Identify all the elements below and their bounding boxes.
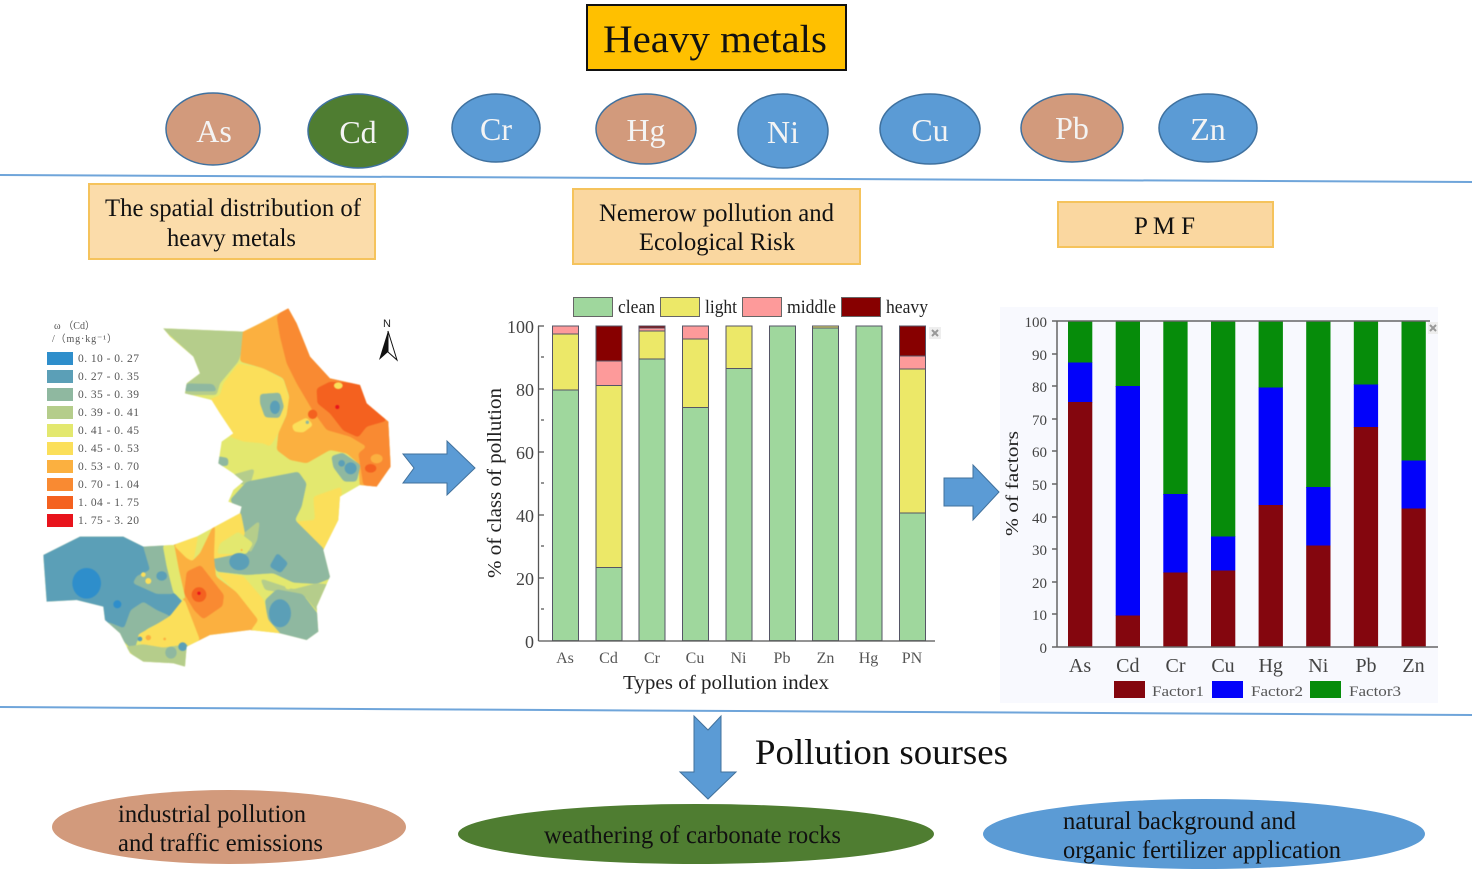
x axis labels: Cd (599, 650, 618, 667)
badge: Ni (738, 94, 828, 168)
y axis labels: 20 (516, 569, 534, 589)
arrow: charts to pollution sources (680, 716, 736, 799)
badge: Ni: Ni (767, 114, 799, 150)
x axis labels: Cr (644, 650, 661, 667)
badge: As (166, 93, 260, 165)
y axis labels: 100 (507, 317, 534, 337)
source: natural background and organic fertilizer application: organic fertilizer application (1063, 837, 1341, 864)
icon: chart handle (1428, 322, 1438, 334)
icon: north arrow: N (383, 318, 391, 330)
map legend: 0. 45 - 0. 53 (78, 443, 139, 455)
x axis labels: Pb (1355, 655, 1377, 677)
badge: Cd (308, 94, 408, 168)
y axis title: % of factors (1002, 431, 1022, 536)
x axis labels: PN (902, 650, 923, 667)
map legend: 0. 35 - 0. 39 (78, 389, 139, 401)
x axis labels: Cu (686, 650, 704, 667)
arrow: map to Nemerow chart (403, 441, 475, 495)
badge: Hg: Hg (626, 112, 666, 148)
icon: north arrow (379, 318, 397, 360)
y axis labels: 40 (1032, 511, 1047, 527)
x axis labels: Ni (730, 650, 747, 667)
chart legend: Factor2 (1251, 684, 1303, 700)
map legend: 0. 10 - 0. 27 (78, 353, 139, 365)
badge: Cr (452, 94, 540, 162)
chart legend: clean (618, 297, 655, 318)
title: Heavy metals: Heavy metals (603, 18, 827, 61)
y axis labels: 80 (1032, 380, 1047, 396)
heading: spatial distribution: The spatial distribution of (105, 195, 362, 222)
y axis labels: 0 (1040, 641, 1047, 657)
source: industrial pollution and traffic emissions: industrial pollution (118, 801, 306, 828)
chart legend: heavy (886, 297, 928, 318)
y axis labels: 40 (516, 506, 534, 526)
badge: Pb: Pb (1055, 110, 1089, 146)
y axis labels: 50 (1032, 478, 1047, 494)
map legend: 1. 04 - 1. 75 (78, 497, 139, 509)
badge: Zn (1159, 94, 1257, 162)
y axis labels (1024, 315, 1047, 657)
x axis labels: Cu (1211, 655, 1235, 677)
badge: Hg (596, 94, 696, 164)
y axis labels: 60 (516, 443, 534, 463)
y axis labels: 30 (1032, 543, 1047, 559)
map regions (42, 308, 392, 668)
y axis labels: 20 (1032, 576, 1047, 592)
map legend: /（mg·kg⁻¹） (52, 333, 117, 345)
chart legend: Factor3 (1349, 684, 1401, 700)
x axis labels: Zn (1402, 655, 1425, 677)
badge: Pb (1021, 94, 1123, 162)
y axis labels (507, 317, 534, 652)
heading: PMF: P M F (1134, 213, 1195, 240)
chart legend: middle (787, 297, 836, 318)
heading: Nemerow pollution and ecological risk: Ecological Risk (639, 229, 795, 256)
icon: chart handle (929, 327, 941, 339)
y axis labels: 0 (525, 632, 534, 652)
source: industrial pollution and traffic emissions: and traffic emissions (118, 830, 323, 857)
heading: spatial distribution (89, 184, 375, 259)
stacked bar chart: Nemerow classes (484, 297, 941, 694)
heading: Pollution sourses: Pollution sourses (755, 732, 1008, 772)
x axis labels: Ni (1308, 655, 1329, 677)
y axis labels: 60 (1032, 445, 1047, 461)
x axis labels: As (1069, 655, 1091, 677)
x axis labels: Cd (1116, 655, 1139, 677)
x axis title: Types of pollution index (623, 672, 829, 694)
x axis labels (1069, 655, 1425, 677)
badge: Cu (880, 94, 980, 164)
source: natural background and organic fertilizer application (983, 799, 1425, 869)
map legend (47, 320, 139, 527)
y axis labels: 90 (1032, 348, 1047, 364)
badge: As: As (196, 113, 232, 149)
x axis labels: Hg (859, 650, 878, 667)
source: natural background and organic fertilizer application: natural background and (1063, 808, 1296, 835)
badge: Zn: Zn (1190, 111, 1226, 147)
source: weathering of carbonate rocks: weathering of carbonate rocks (544, 822, 841, 849)
stacked bars (552, 326, 926, 641)
arrow: Nemerow chart to PMF chart (944, 465, 999, 520)
badge: Cu: Cu (911, 112, 949, 148)
map legend: 0. 41 - 0. 45 (78, 425, 139, 437)
chart legend: Factor1 (1152, 684, 1204, 700)
badge: Cd: Cd (339, 114, 377, 150)
y axis labels: 80 (516, 380, 534, 400)
x axis labels (556, 650, 923, 667)
heading: spatial distribution: heavy metals (167, 225, 296, 252)
chart legend: light (705, 297, 738, 318)
map legend: 0. 39 - 0. 41 (78, 407, 139, 419)
x axis labels: Pb (774, 650, 790, 667)
metal badges row (166, 93, 1257, 168)
y axis labels: 10 (1032, 608, 1047, 624)
y axis labels: 100 (1024, 315, 1047, 331)
title: Heavy metals (587, 5, 846, 70)
stacked bar chart: PMF factors (1000, 307, 1438, 703)
source: weathering of carbonate rocks (458, 804, 934, 864)
map legend: 0. 27 - 0. 35 (78, 371, 139, 383)
chart legend (574, 297, 928, 318)
heading: Nemerow pollution and ecological risk: Nemerow pollution and (599, 200, 834, 227)
x axis labels: Zn (817, 650, 834, 667)
map legend: 1. 75 - 3. 20 (78, 515, 139, 527)
source: industrial pollution and traffic emissions (52, 790, 406, 864)
map legend: 0. 70 - 1. 04 (78, 479, 139, 491)
heading: Nemerow pollution and ecological risk (573, 189, 860, 264)
map legend: ω （Cd） (54, 320, 95, 332)
stacked bars (1068, 321, 1426, 647)
heading: PMF (1058, 202, 1273, 247)
map legend: 0. 53 - 0. 70 (78, 461, 139, 473)
map: Cd spatial distribution (42, 308, 398, 668)
x axis labels: Hg (1258, 655, 1283, 677)
x axis labels: Cr (1166, 655, 1186, 677)
badge: Cr: Cr (480, 111, 512, 147)
x axis labels: As (556, 650, 574, 667)
y axis labels: 70 (1032, 413, 1047, 429)
y axis title: % of class of pollution (484, 388, 506, 578)
chart legend (1114, 681, 1401, 700)
